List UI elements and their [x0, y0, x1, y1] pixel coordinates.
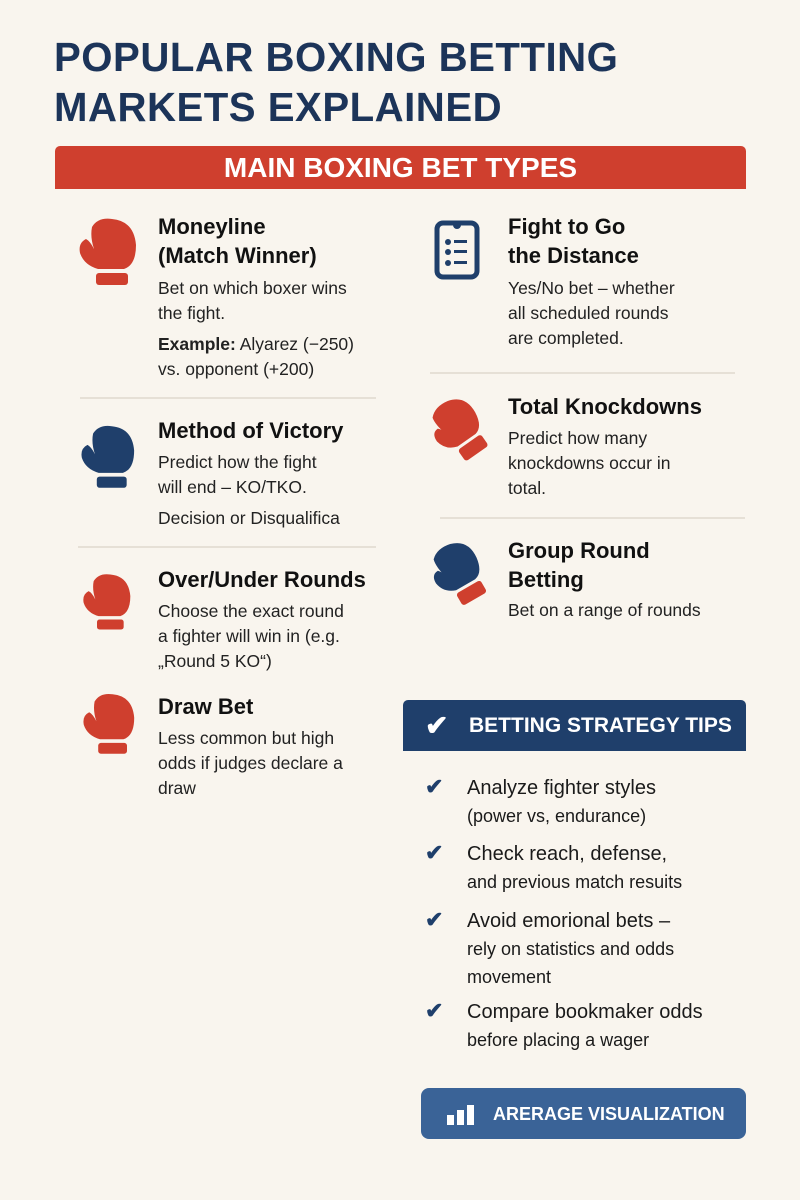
item: method of victory: Predict how the fight: [158, 452, 317, 472]
panel: betting strategy tips: movement: [467, 967, 551, 987]
icon: navy glove: [82, 426, 134, 488]
panel: betting strategy tips: and previous match resuits: [467, 872, 682, 892]
item: moneyline: Bet on which boxer wins: [158, 278, 347, 298]
item: fight to go the distance: Fight to Go: [508, 214, 625, 239]
panel: betting strategy tips: Compare bookmaker odds: [467, 1001, 703, 1023]
item: moneyline: vs. opponent (+200): [158, 359, 314, 379]
item: total knockdowns: total.: [508, 478, 546, 498]
item: fight to go the distance: are completed.: [508, 328, 624, 348]
item: total knockdowns: [432, 394, 702, 498]
icon: red glove: [80, 218, 136, 285]
panel: betting strategy tips: ✔: [425, 998, 443, 1023]
tip 4: [425, 998, 703, 1050]
item: total knockdowns: knockdowns occur in: [508, 453, 670, 473]
button: average visualization: [421, 1088, 746, 1139]
tips header: ✔: [425, 710, 448, 741]
item: method of victory: Decision or Disqualifica: [158, 508, 340, 528]
panel: betting strategy tips: rely on statistics and odds: [467, 939, 674, 959]
item: fight to go the distance: the Distance: [508, 243, 639, 268]
title: POPULAR BOXING BETTING: [54, 34, 618, 80]
panel: betting strategy tips: ✔: [425, 907, 443, 932]
panel: betting strategy tips: ✔: [425, 840, 443, 865]
icon: clipboard: [434, 220, 480, 280]
icon: navy/red glove: [434, 543, 486, 605]
icon: bar chart: [447, 1105, 474, 1125]
item: fight to go the distance: [434, 214, 675, 348]
item: draw bet: [83, 694, 343, 798]
item: moneyline: the fight.: [158, 303, 225, 323]
panel: betting strategy tips: ✔: [425, 774, 443, 799]
item: over/under rounds: Over/Under Rounds: [158, 567, 366, 592]
item: over/under rounds: „Round 5 KO“): [158, 651, 272, 671]
item: moneyline: Example: Alyarez (−250): [158, 334, 354, 354]
panel: betting strategy tips: before placing a wager: [467, 1030, 649, 1050]
tip 1: [425, 774, 656, 826]
item: draw bet: Less common but high: [158, 728, 334, 748]
banner: main bet types: [55, 146, 746, 189]
tips header: [403, 700, 746, 751]
icon: red glove: [83, 694, 134, 754]
item: over/under rounds: Choose the exact round: [158, 601, 344, 621]
item: moneyline: [80, 214, 354, 379]
icon: red tilted glove: [432, 399, 488, 460]
title: MARKETS EXPLAINED: [54, 84, 502, 130]
panel: betting strategy tips: (power vs, endurance): [467, 806, 646, 826]
item: fight to go the distance: all scheduled rounds: [508, 303, 669, 323]
title: [54, 34, 618, 130]
panel: betting strategy tips: Check reach, defense,: [467, 843, 667, 865]
icon: red glove: [83, 574, 130, 630]
item: fight to go the distance: Yes/No bet – whether: [508, 278, 675, 298]
banner: main bet types: MAIN BOXING BET TYPES: [224, 152, 577, 183]
item: over/under rounds: [83, 567, 366, 671]
panel: betting strategy tips: [403, 700, 746, 1050]
tip 3: [425, 907, 674, 987]
panel: betting strategy tips: Avoid emorional bets –: [467, 910, 670, 932]
item: group round betting: [434, 538, 701, 620]
item: group round betting: Bet on a range of rounds: [508, 600, 701, 620]
item: method of victory: will end – KO/TKO.: [158, 477, 307, 497]
tips header: BETTING STRATEGY TIPS: [469, 714, 732, 737]
item: draw bet: Draw Bet: [158, 694, 253, 719]
item: method of victory: Method of Victory: [158, 418, 343, 443]
item: group round betting: Betting: [508, 567, 584, 592]
tip 2: [425, 840, 682, 892]
button: average visualization: ARERAGE VISUALIZATION: [493, 1104, 725, 1124]
item: moneyline: (Match Winner): [158, 243, 317, 268]
item: over/under rounds: a fighter will win in (e.g.: [158, 626, 340, 646]
item: method of victory: [82, 418, 344, 528]
panel: betting strategy tips: Analyze fighter styles: [467, 777, 656, 799]
item: moneyline: Moneyline: [158, 214, 266, 239]
item: draw bet: draw: [158, 778, 196, 798]
item: group round betting: Group Round: [508, 538, 650, 563]
item: total knockdowns: Total Knockdowns: [508, 394, 702, 419]
item: draw bet: odds if judges declare a: [158, 753, 343, 773]
item: total knockdowns: Predict how many: [508, 428, 647, 448]
